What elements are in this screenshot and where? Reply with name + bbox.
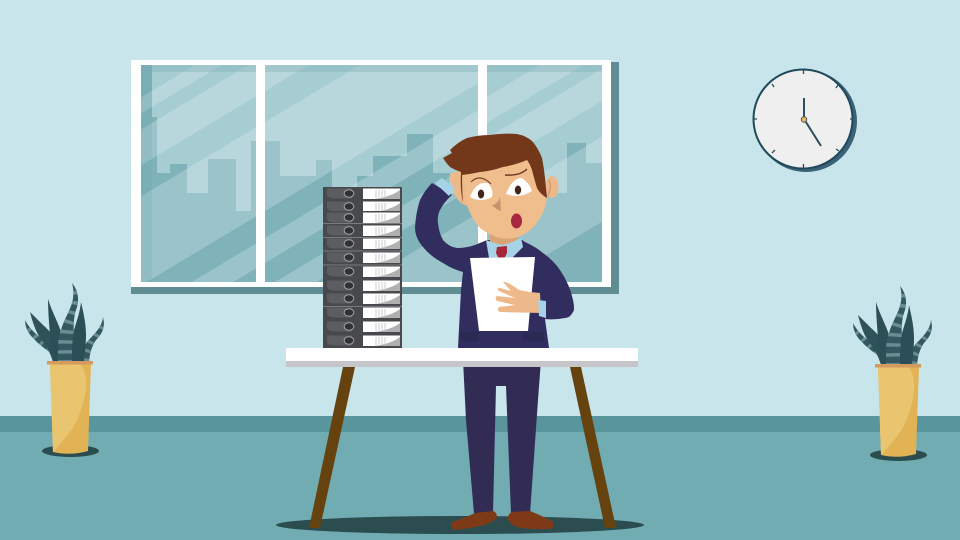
clock ticks	[754, 70, 853, 168]
tie	[496, 246, 507, 259]
eyes	[470, 169, 532, 200]
plant: left	[25, 283, 104, 457]
document	[470, 257, 535, 331]
businessman	[415, 134, 574, 530]
trousers	[463, 360, 541, 514]
right cuff	[538, 300, 546, 318]
raised hand behind head	[449, 172, 468, 206]
desk edge	[286, 361, 638, 367]
binder stack	[323, 187, 402, 348]
clock	[754, 70, 857, 172]
desk legs	[309, 367, 616, 528]
face	[463, 157, 547, 239]
raised arm cuff	[435, 178, 455, 196]
neck	[490, 232, 518, 248]
window frame	[131, 60, 611, 287]
desk	[286, 348, 638, 528]
holding hand	[496, 282, 541, 313]
left shoe	[451, 511, 497, 530]
plant and pot	[25, 283, 104, 454]
window glass: left and centre panes	[141, 65, 478, 282]
pot shadow	[42, 445, 99, 457]
clock hands	[804, 98, 821, 146]
wall background	[0, 0, 960, 416]
nose	[492, 197, 501, 211]
shirt collar	[486, 238, 523, 258]
clock face	[754, 70, 852, 168]
window shadow	[131, 62, 619, 294]
hair	[443, 134, 547, 203]
plant and pot	[853, 286, 932, 457]
clock centre pin	[801, 117, 807, 122]
clock shadow	[755, 70, 857, 172]
floor shadow under desk	[276, 516, 644, 534]
pot shadow	[870, 449, 927, 461]
window	[131, 60, 619, 294]
desk top	[286, 348, 638, 362]
right shoe	[508, 511, 554, 529]
plant: right	[853, 286, 932, 461]
jacket pockets	[460, 332, 544, 341]
jacket	[415, 183, 574, 348]
window glass: right pane	[487, 65, 602, 282]
mouth	[511, 214, 522, 228]
floor	[0, 432, 960, 540]
floor skirting band	[0, 416, 960, 432]
right ear	[546, 176, 558, 198]
